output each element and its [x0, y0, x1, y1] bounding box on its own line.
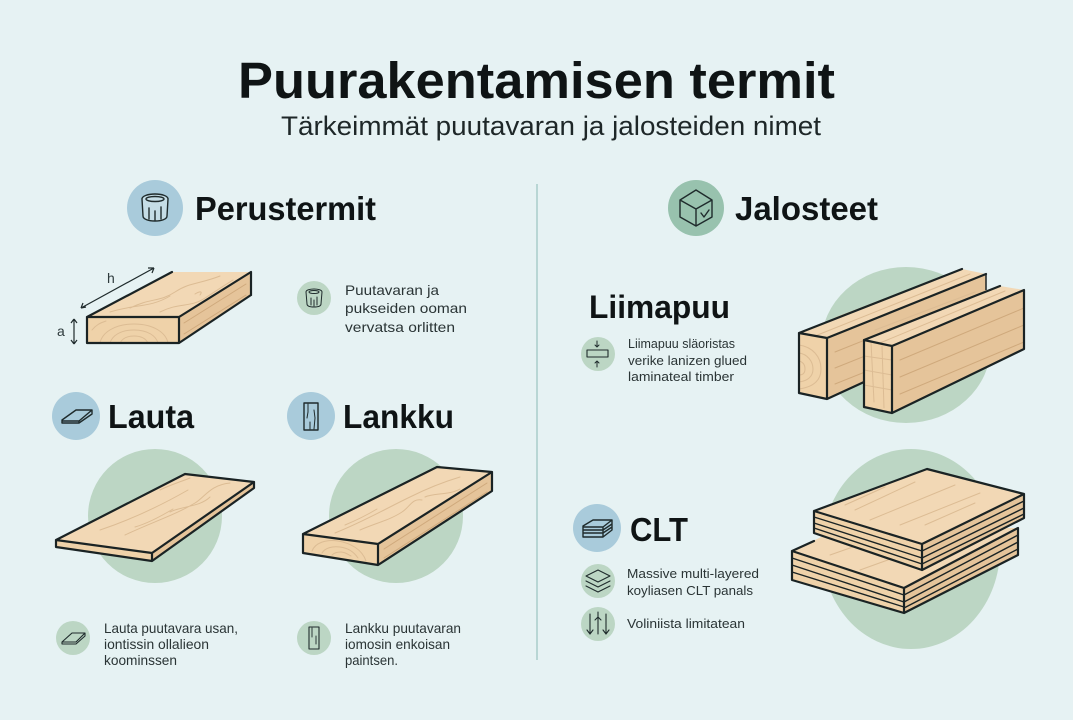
illustration: dimensioned timber beam	[57, 268, 251, 344]
icon: stacked panels	[573, 504, 621, 552]
text: CLT note: Voliniista limitatean	[627, 616, 745, 631]
text: Lankku description: iomosin enkoisan	[345, 636, 450, 652]
beam 1	[799, 269, 986, 399]
heading: Lauta: Lauta	[108, 398, 195, 435]
subtitle: Tärkeimmät puutavaran ja jalosteiden nimet	[281, 111, 822, 141]
arrow: h dimension	[81, 268, 154, 308]
panel: CLT heading	[573, 504, 688, 552]
illustration: glulam beams	[799, 267, 1024, 423]
text: Lauta description: koominssen	[104, 652, 177, 668]
illustration: Lauta board	[56, 449, 254, 583]
heading: Liimapuu: Liimapuu	[589, 289, 730, 325]
text: Lankku description: paintsen.	[345, 652, 398, 668]
illustration: CLT panels	[792, 449, 1024, 649]
icon: board	[52, 392, 100, 440]
text: CLT description: Massive multi-layered	[627, 566, 759, 581]
arrow: a dimension: a	[57, 323, 65, 339]
icon: box with check	[668, 180, 724, 236]
icon: compression	[581, 337, 615, 371]
icon: small plank	[297, 621, 331, 655]
icon: small board	[56, 621, 90, 655]
lower panel	[792, 528, 1018, 613]
text: CLT description: koyliasen CLT panals	[627, 583, 754, 598]
heading: CLT: CLT	[630, 511, 688, 548]
arrow: h dimension: h	[107, 270, 115, 286]
icon: arrows	[581, 607, 615, 641]
text: Perustermit description: pukseiden ooman	[345, 300, 467, 316]
upper panel	[814, 469, 1024, 570]
icon: small log	[297, 281, 331, 315]
panel: Lauta heading	[52, 392, 195, 440]
text: Perustermit description: Puutavaran ja	[345, 282, 439, 298]
text: Lauta description: Lauta puutavara usan,	[104, 620, 238, 636]
illustration: Lankku plank	[303, 449, 492, 583]
title: Puurakentamisen termit	[238, 52, 835, 109]
panel: Lankku heading	[287, 392, 454, 440]
text: Perustermit description: vervatsa orlitten	[345, 319, 455, 335]
heading: Jalosteet: Jalosteet	[735, 190, 878, 227]
icon: layers	[581, 564, 615, 598]
text: Lauta description: iontissin ollalieon	[104, 636, 209, 652]
text: Liimapuu description: laminateal timber	[628, 369, 735, 384]
heading: Lankku: Lankku	[343, 398, 454, 435]
text: Lankku description: Lankku puutavaran	[345, 620, 461, 636]
icon: plank	[287, 392, 335, 440]
panel: Perustermit heading	[127, 180, 376, 236]
panel: Jalosteet heading	[668, 180, 878, 236]
beam 2	[864, 286, 1024, 413]
text: Liimapuu description: verike lanizen glued	[628, 353, 747, 368]
heading: Perustermit: Perustermit	[195, 190, 376, 227]
arrow: a dimension	[57, 319, 77, 344]
text: Liimapuu description: Liimapuu släoristas	[628, 336, 735, 351]
icon: log	[127, 180, 183, 236]
